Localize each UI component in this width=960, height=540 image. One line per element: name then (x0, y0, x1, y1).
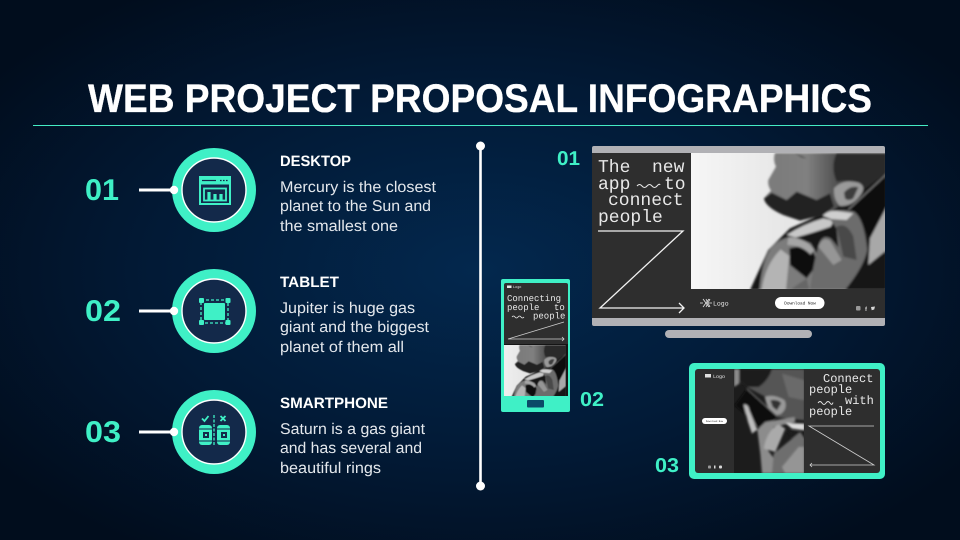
headline: people (598, 208, 663, 228)
connector 03 (139, 430, 174, 434)
social icons (856, 306, 875, 313)
text: desktop: Mercury is the closest (280, 179, 437, 196)
phone squiggle (512, 316, 524, 318)
text: smartphone: beautiful rings (280, 460, 381, 477)
headline: new (652, 158, 685, 178)
tablet headline: Connect (823, 372, 873, 386)
phone headline: people (507, 303, 539, 313)
item: smartphone (85, 390, 426, 477)
heading: smartphone: SMARTPHONE (280, 395, 388, 412)
home button (527, 400, 544, 408)
headline: app (598, 175, 630, 195)
text: tablet: planet of them all (280, 339, 404, 356)
circle 02 (170, 269, 256, 353)
tablet button (702, 418, 727, 424)
phone headline: Connecting (507, 294, 561, 304)
logo: Logo (713, 300, 729, 308)
monitor frame (592, 146, 885, 326)
logo (700, 299, 729, 308)
text: smartphone: Saturn is a gas giant (280, 421, 426, 438)
monitor stand (665, 330, 812, 338)
connector 01 (139, 188, 174, 192)
tablet body (689, 363, 885, 479)
tablet button: Download Now (706, 420, 724, 423)
tablet mockup (689, 363, 885, 479)
tablet logo (705, 374, 725, 380)
connector 02 (139, 310, 174, 312)
phone photo (504, 344, 568, 396)
tablet headline: with (845, 394, 874, 408)
download button (775, 297, 824, 309)
text: desktop: planet to the Sun and (280, 198, 431, 215)
phone logo: Logo (513, 285, 521, 290)
headline (598, 158, 686, 228)
z arrow (598, 231, 684, 313)
tablet photo (734, 369, 805, 474)
headline: to (664, 175, 686, 195)
squiggle (637, 184, 660, 188)
text: desktop (280, 179, 437, 235)
photo: man on phone (691, 153, 887, 290)
text: smartphone: and has several and (280, 440, 422, 457)
circle 03 (170, 390, 256, 474)
phone screen (504, 283, 568, 396)
number 02: 02 (85, 295, 121, 328)
center divider (476, 142, 485, 490)
item: tablet (85, 269, 430, 356)
phone headline (507, 294, 565, 322)
heading: desktop: DESKTOP (280, 153, 351, 170)
phone arrow (508, 322, 564, 341)
desktop mockup (592, 146, 887, 338)
label 01: 01 (557, 148, 580, 170)
tablet logo: Logo (713, 374, 725, 380)
text: smartphone (280, 421, 426, 477)
tablet headline: people (809, 405, 852, 419)
label 02: 02 (580, 389, 604, 411)
icon: selection frame (199, 298, 230, 325)
screen panel (592, 153, 885, 318)
text: tablet: Jupiter is huge gas (280, 300, 415, 317)
number 03: 03 (85, 416, 121, 449)
label 03: 03 (655, 455, 679, 477)
phone headline: people (533, 312, 565, 322)
social icons: f (865, 306, 868, 313)
icon: browser window (199, 176, 231, 204)
headline: connect (608, 191, 684, 211)
tablet headline: people (809, 383, 852, 397)
download button: Download Now (784, 300, 816, 306)
title: WEB PROJECT PROPOSAL INFOGRAPHICS (88, 77, 872, 121)
text: tablet: giant and the biggest (280, 319, 430, 336)
smartphone mockup (501, 279, 570, 412)
icon: compare devices (199, 415, 230, 446)
tablet social icons (708, 466, 722, 468)
text: desktop: the smallest one (280, 218, 398, 235)
tablet arrow (809, 426, 874, 467)
heading: tablet: TABLET (280, 274, 339, 291)
phone headline: to (554, 303, 565, 313)
item: desktop (85, 148, 437, 235)
number 01: 01 (85, 174, 119, 207)
tablet screen (695, 369, 880, 473)
tablet squiggle (818, 402, 833, 404)
text: tablet (280, 300, 430, 356)
headline: The (598, 158, 630, 178)
circle 01 (170, 148, 256, 232)
tablet headline (809, 372, 874, 419)
phone body (501, 279, 570, 412)
